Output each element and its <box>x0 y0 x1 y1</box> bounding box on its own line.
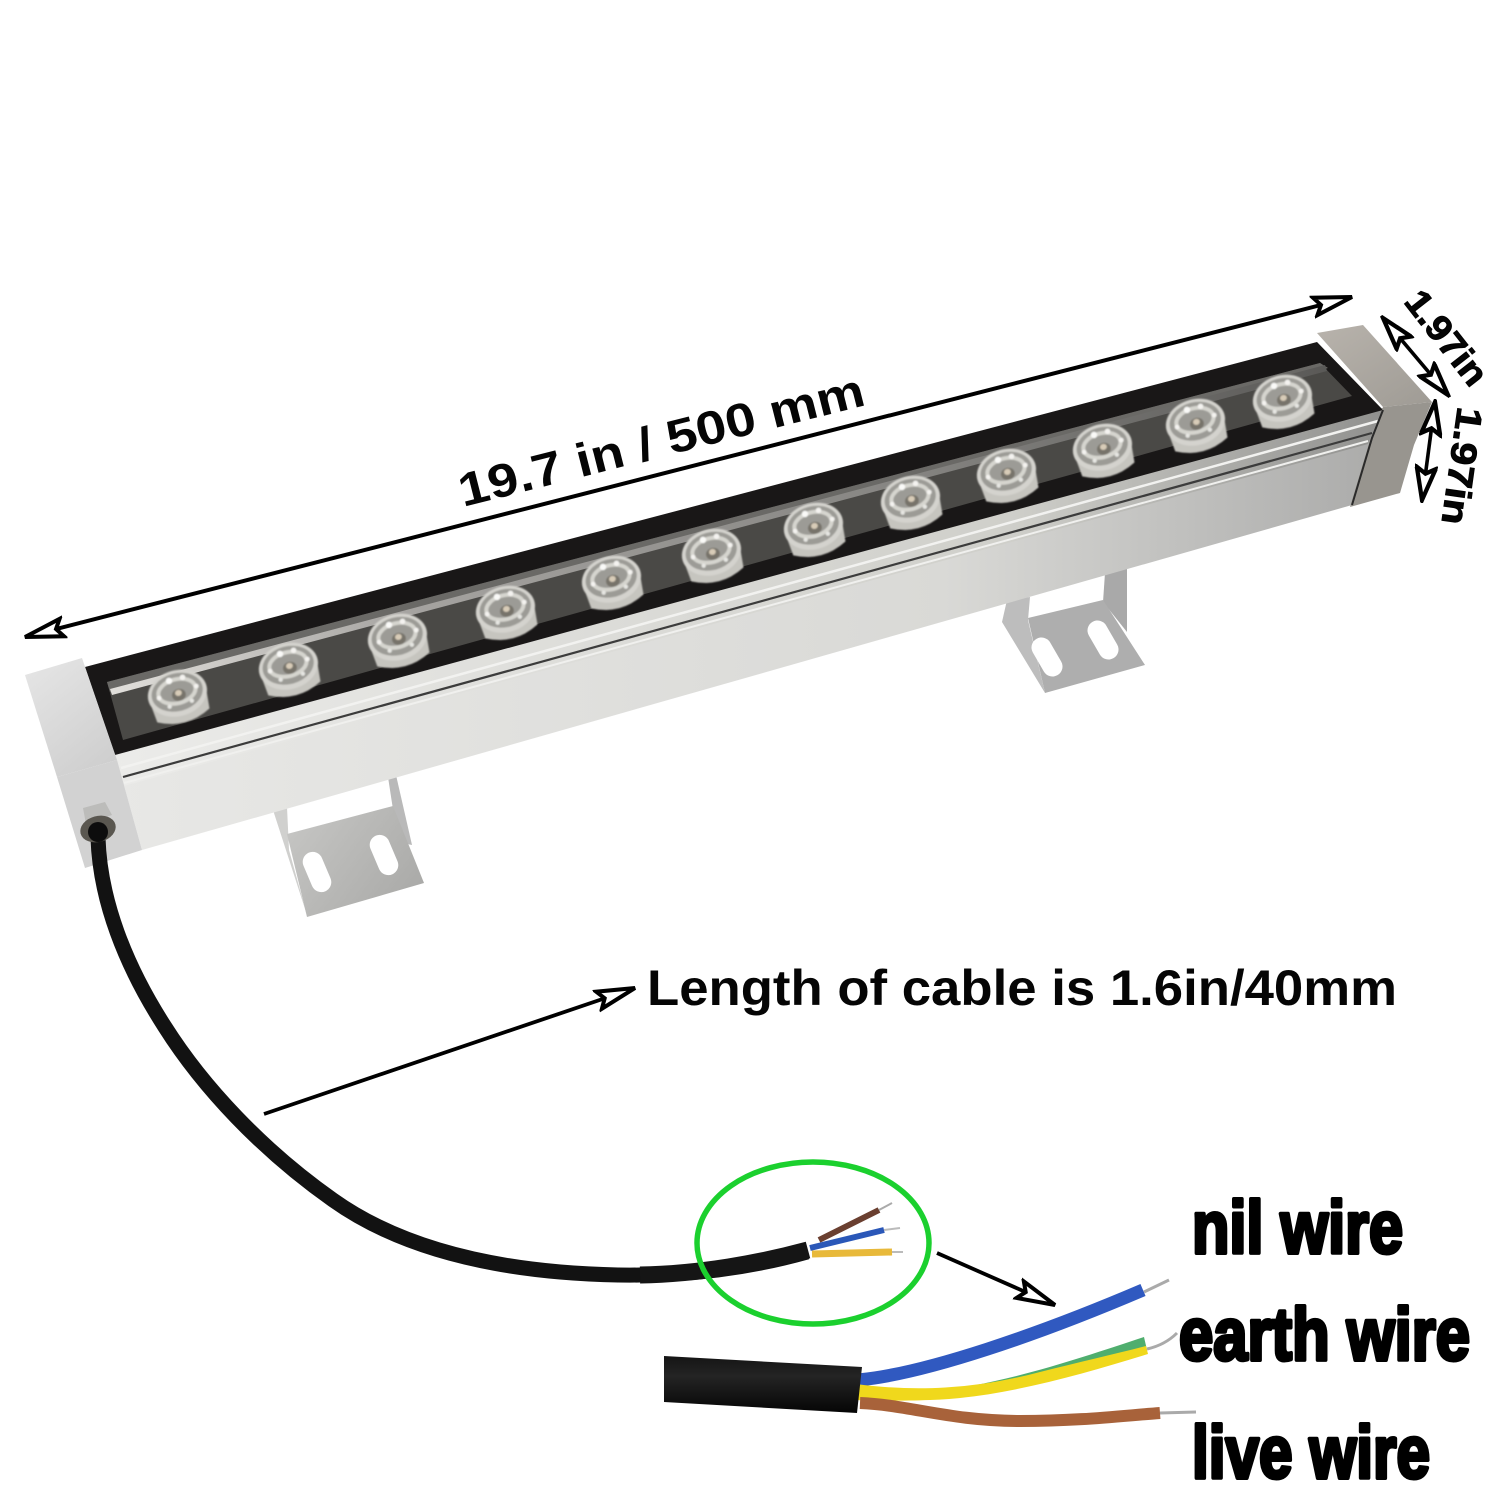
label: cable length: Length of cable is 1.6in/40mm <box>647 960 1397 1016</box>
label: length dimension: 19.7 in / 500 mm <box>452 363 870 517</box>
LED lens 5 <box>577 549 648 616</box>
small cable end <box>640 1203 903 1275</box>
LED lens 7 <box>779 496 850 563</box>
LED lens 2 <box>254 636 325 703</box>
LED lens 3 <box>363 607 434 674</box>
cable connector <box>77 802 119 846</box>
LED lens 8 <box>876 469 947 536</box>
front face of housing <box>117 410 1383 850</box>
LED lens 6 <box>677 522 748 589</box>
inner window <box>107 363 1352 740</box>
label: height dimension: 1.97in <box>1434 405 1491 527</box>
rail strip <box>115 408 1383 786</box>
LED lens 4 <box>471 579 542 646</box>
right end cap <box>1317 325 1432 507</box>
LED lens 9 <box>972 442 1043 509</box>
LED lens 10 <box>1068 417 1139 484</box>
bracket: right mounting bracket <box>1002 568 1145 693</box>
brown wire <box>860 1403 1196 1421</box>
label: nil wire: nil wire <box>1192 1186 1403 1269</box>
enlarged cable with wires <box>664 1280 1196 1421</box>
bracket: left mounting bracket <box>273 775 424 917</box>
blue wire <box>858 1280 1169 1380</box>
dimension arrow: length <box>25 297 1352 637</box>
arrow: zoom to detail <box>937 1253 1055 1305</box>
green highlight circle <box>697 1162 929 1324</box>
light bar housing <box>25 325 1432 868</box>
dimension arrow: height <box>1422 402 1435 500</box>
arrow: cable length pointer <box>264 988 635 1114</box>
label: live wire: live wire <box>1192 1411 1430 1494</box>
LED lens 12 <box>1248 368 1319 435</box>
black window frame <box>85 342 1383 755</box>
cable sheath <box>664 1356 862 1413</box>
LED lens 11 <box>1161 392 1232 459</box>
earth wire <box>856 1333 1177 1401</box>
dimension arrow: width <box>1383 318 1448 395</box>
LED lens 1 <box>143 663 214 730</box>
power cable <box>98 838 807 1275</box>
left end cap <box>25 658 142 868</box>
label: width dimension: 1.97in <box>1397 282 1497 394</box>
